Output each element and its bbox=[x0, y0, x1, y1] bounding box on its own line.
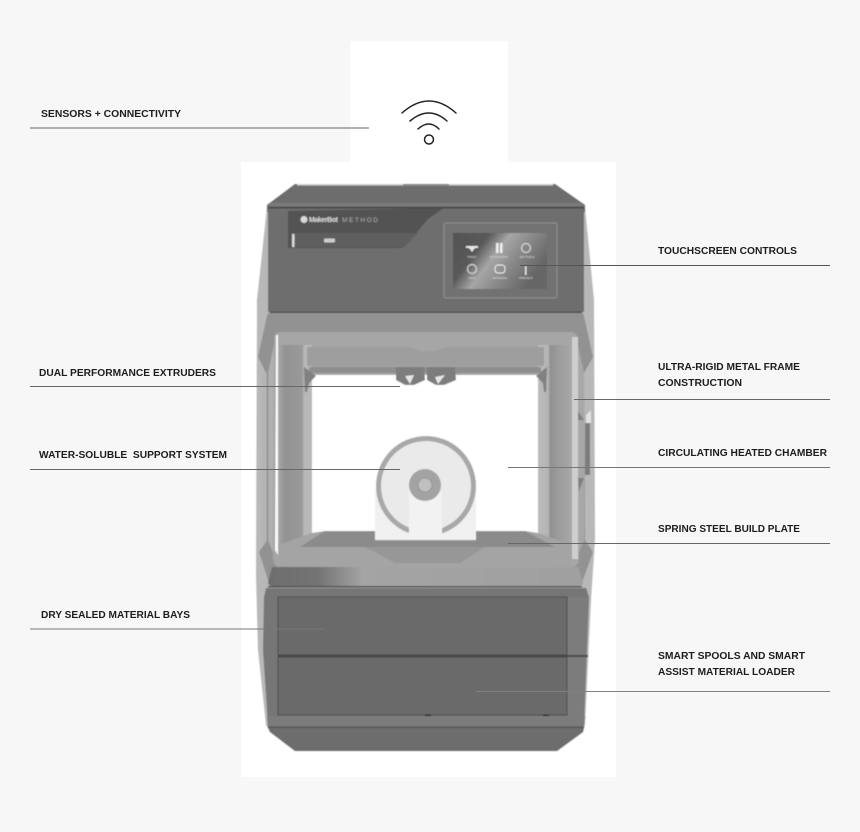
touchscreen: SETTINGS bbox=[519, 255, 535, 259]
touchscreen: PREHEAT bbox=[519, 276, 533, 280]
callout: smart spools and smart assist material loader bbox=[476, 650, 830, 692]
white chamber opening bbox=[312, 375, 538, 533]
side strips bbox=[262, 373, 267, 545]
callout: spring steel build plate: SPRING STEEL BUILD PLATE bbox=[658, 523, 800, 535]
touchscreen bbox=[444, 223, 557, 298]
control strip with logo bbox=[288, 208, 444, 248]
printer top cap bbox=[267, 184, 585, 212]
build plate bbox=[278, 531, 572, 567]
lower material bay bbox=[278, 657, 567, 715]
top gantry bbox=[307, 347, 544, 366]
side handle bbox=[578, 410, 591, 491]
touchscreen: PRINT bbox=[468, 255, 477, 259]
control strip with logo: METHOD bbox=[342, 217, 378, 224]
base bbox=[268, 727, 584, 751]
printer control panel bbox=[268, 207, 584, 312]
callout: ultra-rigid metal frame bbox=[574, 361, 830, 400]
control strip with logo: MakerBot bbox=[309, 217, 339, 224]
callout: dual performance extruders: DUAL PERFORMANCE EXTRUDERS bbox=[39, 367, 216, 379]
upper material bay bbox=[278, 597, 567, 655]
chamber side columns bbox=[278, 345, 312, 545]
callout: smart spools and smart assist material loader: SMART SPOOLS AND SMART bbox=[658, 650, 806, 662]
callout: sensors and connectivity: SENSORS + CONNECTIVITY bbox=[41, 108, 181, 120]
callout: circulating heated chamber: CIRCULATING HEATED CHAMBER bbox=[658, 447, 827, 459]
white panel behind wifi icon bbox=[350, 41, 508, 162]
white panel behind printer bbox=[241, 162, 616, 777]
touchscreen: MATERIAL bbox=[493, 276, 508, 280]
callout: touchscreen controls: TOUCHSCREEN CONTROLS bbox=[658, 245, 797, 257]
callout: dry sealed material bays: DRY SEALED MATERIAL BAYS bbox=[41, 609, 190, 621]
printed spool model bbox=[375, 436, 476, 542]
lower sill bbox=[268, 567, 583, 586]
chamber glass highlights bbox=[275, 335, 278, 555]
callout: smart spools and smart assist material loader: ASSIST MATERIAL LOADER bbox=[658, 666, 795, 678]
callout: ultra-rigid metal frame: CONSTRUCTION bbox=[658, 377, 742, 389]
extruders bbox=[396, 367, 456, 385]
material bay housing bbox=[263, 588, 589, 725]
callout: ultra-rigid metal frame: ULTRA-RIGID METAL FRAME bbox=[658, 361, 800, 373]
window frame band bbox=[258, 312, 593, 580]
printer outer sides bbox=[256, 207, 595, 751]
chamber interior bbox=[273, 332, 579, 567]
touchscreen: INFO bbox=[468, 276, 476, 280]
printer illustration bbox=[256, 184, 595, 751]
touchscreen: EXTRUDERS bbox=[490, 255, 508, 259]
callout: water-soluble support system: WATER-SOLUBLE SUPPORT SYSTEM bbox=[39, 449, 227, 461]
icon: wifi bbox=[402, 101, 456, 144]
